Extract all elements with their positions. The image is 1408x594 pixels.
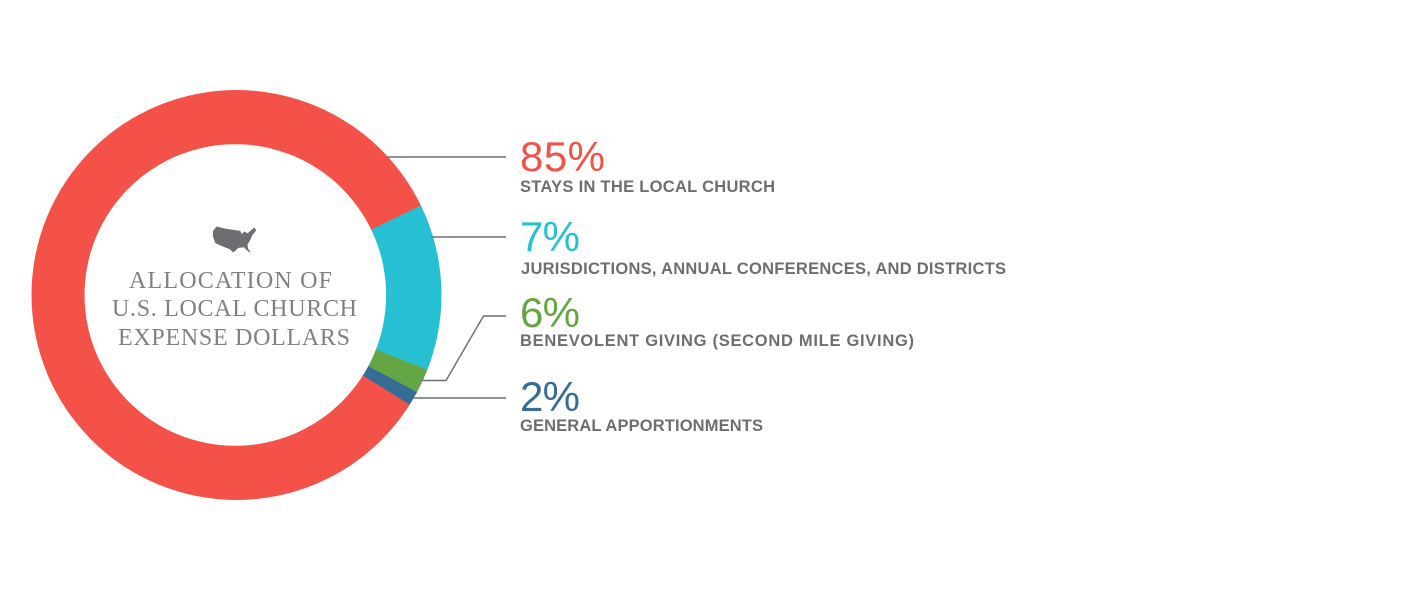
leader line: 85% [387, 156, 506, 158]
leader line: 2% [413, 397, 506, 399]
donut hole [84, 144, 386, 446]
callout: 6% [520, 289, 914, 350]
callout: 85%: STAYS IN THE LOCAL CHURCH [520, 178, 775, 196]
callout: 85% [520, 133, 775, 196]
segment: 2% general apportionments [362, 366, 417, 404]
callout: 2% [520, 373, 763, 435]
chart title [112, 268, 357, 351]
segment: 7% jurisdictions [371, 206, 442, 370]
callout: 7%: JURISDICTIONS, ANNUAL CONFERENCES, AND DISTRICTS [521, 260, 1006, 278]
callout: 2%: GENERAL APPORTIONMENTS [520, 417, 763, 435]
chart title: ALLOCATION OF [129, 268, 332, 294]
segment: 85% stays in the local church [32, 90, 422, 500]
donut chart [32, 90, 442, 500]
leader line: 6% [422, 316, 506, 380]
callout: 2%: 2% [520, 373, 580, 420]
callout: 7%: 7% [520, 213, 580, 260]
callout: 85%: 85% [520, 133, 605, 180]
callout: 6%: 6% [520, 289, 580, 336]
leader line: 7% [431, 236, 506, 238]
icon: map of the United States [213, 227, 256, 252]
segment: 6% benevolent giving [368, 349, 428, 393]
chart title: EXPENSE DOLLARS [118, 325, 350, 351]
callout: 7% [520, 213, 1006, 278]
callout: 6%: BENEVOLENT GIVING (SECOND MILE GIVING) [520, 332, 914, 350]
infographic canvas [32, 90, 1006, 500]
chart title: U.S. LOCAL CHURCH [112, 296, 357, 322]
